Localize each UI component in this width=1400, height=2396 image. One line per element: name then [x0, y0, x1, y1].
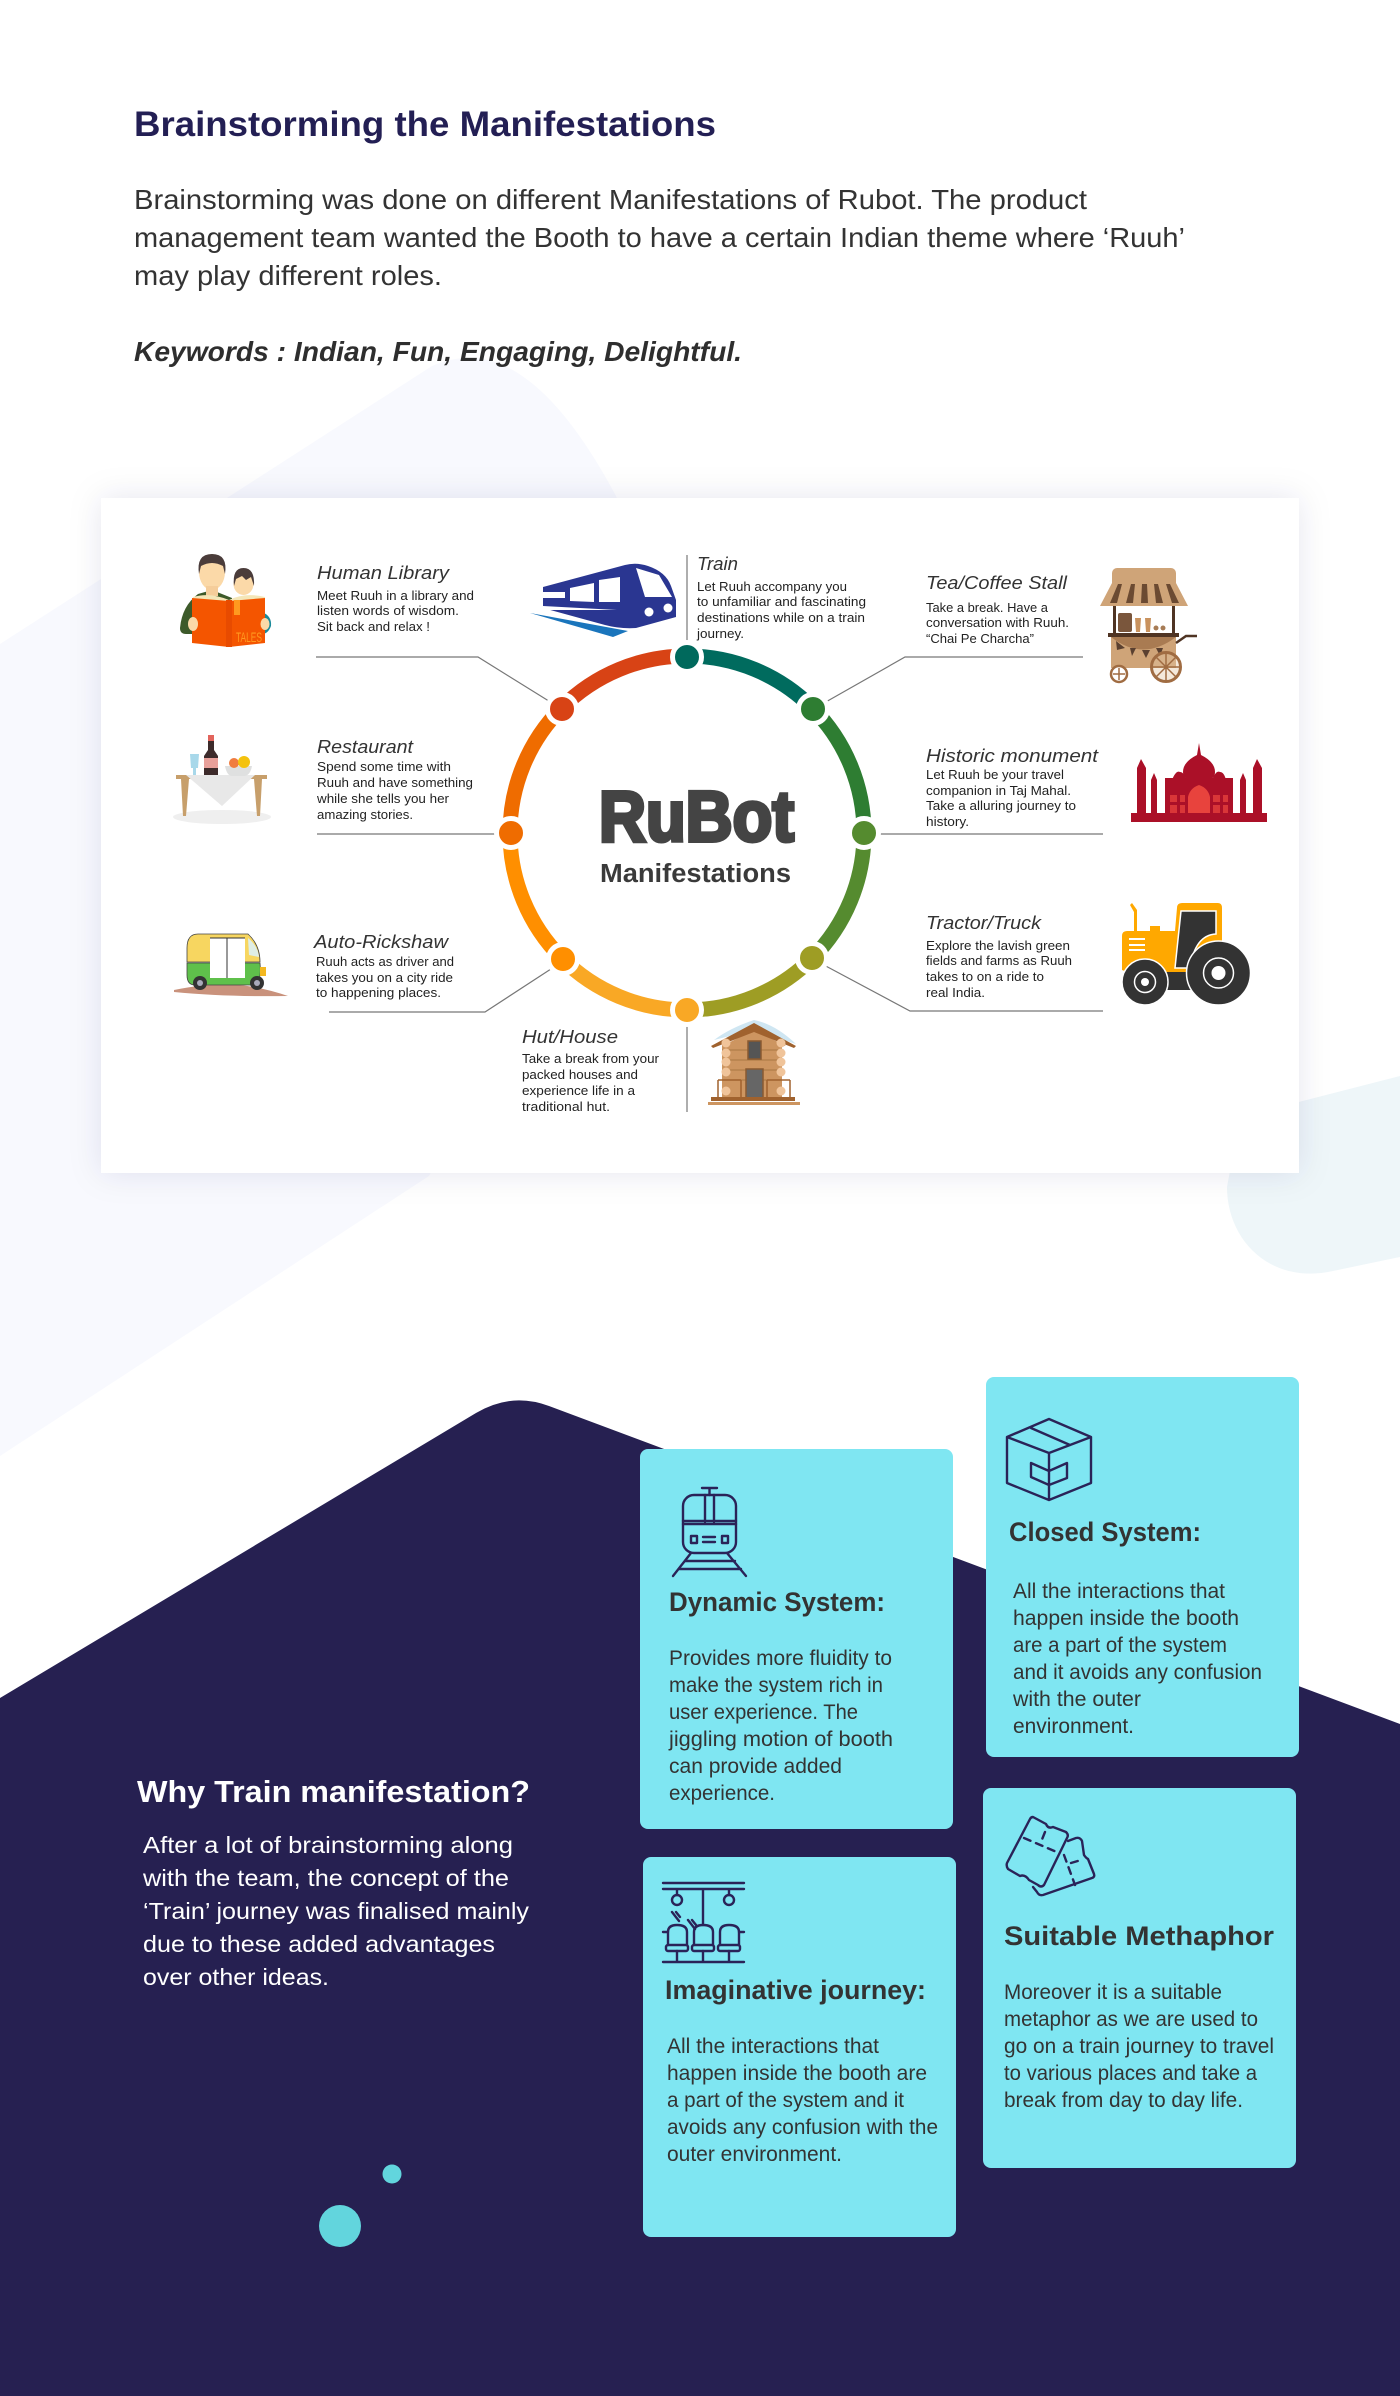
heading: Brainstorming the Manifestations — [134, 105, 716, 144]
label: Tractor/Truck — [926, 912, 1072, 1000]
card: Closed System: All the interactions that — [1013, 1580, 1225, 1603]
card: Closed System: happen inside the booth — [1013, 1607, 1239, 1630]
leader lines — [316, 555, 1103, 1112]
label: Historic monument: Let Ruuh be your travel — [926, 767, 1064, 782]
icon: hut — [708, 1020, 800, 1105]
decorative dot large — [319, 2205, 361, 2247]
card: Suitable Methaphor: to various places and take a — [1004, 2062, 1257, 2085]
card: Suitable Methaphor: Suitable Methaphor — [1004, 1921, 1274, 1951]
icon: restaurant table — [173, 735, 271, 824]
label: Auto-Rickshaw: Ruuh acts as driver and — [316, 954, 454, 969]
card: Imaginative journey: outer environment. — [667, 2143, 842, 2166]
card: Suitable Methaphor: break from day to day life. — [1004, 2089, 1243, 2112]
label: Restaurant: Restaurant — [317, 736, 414, 757]
label: Train: Let Ruuh accompany you — [697, 579, 847, 594]
card: Dynamic System: Provides more fluidity to — [669, 1647, 892, 1670]
card: Closed System: with the outer — [1012, 1688, 1141, 1711]
card: Dynamic System: jiggling motion of booth — [668, 1728, 893, 1751]
background shape: navy section — [0, 1400, 1400, 2396]
label: Hut/House: Take a break from your — [522, 1051, 660, 1066]
label: Hut/House — [522, 1026, 660, 1114]
label: Tractor/Truck: real India. — [926, 985, 985, 1000]
label: Historic monument: history. — [926, 814, 969, 829]
intro paragraph — [134, 184, 1185, 291]
label: Train — [696, 553, 866, 641]
keywords: Keywords : Indian, Fun, Engaging, Delightful. — [134, 336, 742, 367]
intro paragraph: management team wanted the Booth to have a certain Indian theme where ‘Ruuh’ — [134, 222, 1185, 253]
logo: RuBot: RuBot — [599, 778, 794, 857]
card: Suitable Methaphor: metaphor as we are used to — [1004, 2008, 1258, 2031]
label: Auto-Rickshaw: to happening places. — [316, 985, 441, 1000]
icon: tractor — [1122, 903, 1250, 1005]
icon: front-view train — [673, 1488, 746, 1576]
icon: human library: TALES — [236, 629, 262, 645]
card: Closed System: Closed System: — [1009, 1517, 1201, 1547]
icon: box — [1007, 1419, 1091, 1500]
card: Closed System — [986, 1377, 1299, 1757]
label: Restaurant: Ruuh and have something — [317, 775, 473, 790]
label: Tea/Coffee Stall: Take a break. Have a — [926, 600, 1049, 615]
label: Historic monument: Historic monument — [926, 745, 1099, 766]
paragraph: why train: due to these added advantages — [143, 1931, 495, 1957]
label: Hut/House: traditional hut. — [522, 1099, 610, 1114]
label: Tractor/Truck: takes to on a ride to — [926, 969, 1044, 984]
intro paragraph: may play different roles. — [134, 260, 442, 291]
label: Historic monument: companion in Taj Mahal. — [926, 783, 1071, 798]
label: Hut/House: experience life in a — [522, 1083, 636, 1098]
label: Human Library: listen words of wisdom. — [317, 603, 459, 618]
paragraph: why train: After a lot of brainstorming along — [143, 1832, 513, 1858]
card: Closed System: environment. — [1013, 1715, 1134, 1738]
label: Tractor/Truck: Explore the lavish green — [926, 938, 1070, 953]
paragraph: why train: ‘Train’ journey was finalised mainly — [143, 1898, 529, 1924]
paragraph: why train — [142, 1832, 529, 1990]
card: Dynamic System: make the system rich in — [669, 1674, 883, 1697]
icon: human library — [180, 554, 271, 647]
card: Imaginative journey: Imaginative journey: — [665, 1975, 926, 2005]
label: Restaurant — [316, 736, 473, 822]
card: Imaginative journey — [643, 1857, 956, 2237]
label: Tractor/Truck: Tractor/Truck — [926, 912, 1043, 933]
card: Suitable Methaphor: Moreover it is a suitable — [1004, 1981, 1222, 2004]
card: Dynamic System: can provide added — [669, 1755, 842, 1778]
background shape: pale teal — [1227, 1076, 1400, 1274]
label: Tea/Coffee Stall: conversation with Ruuh. — [926, 615, 1069, 630]
icon: tea stall — [1100, 568, 1197, 682]
label: Train: to unfamiliar and fascinating — [697, 594, 866, 609]
ring nodes — [496, 642, 878, 1024]
icon: auto rickshaw — [174, 934, 288, 996]
paragraph: why train: with the team, the concept of the — [142, 1865, 509, 1891]
label: Historic monument: Take a alluring journey to — [926, 798, 1076, 813]
label: Train: Train — [697, 553, 738, 574]
icon: historic monument — [1131, 743, 1267, 822]
ring chart — [510, 656, 864, 1010]
label: Tea/Coffee Stall: “Chai Pe Charcha” — [926, 631, 1034, 646]
decorative dot small — [382, 2164, 402, 2184]
label: Tea/Coffee Stall: Tea/Coffee Stall — [926, 572, 1068, 593]
label: Train: destinations while on a train — [697, 610, 865, 625]
label: Human Library: Meet Ruuh in a library and — [317, 588, 474, 603]
card: Closed System: and it avoids any confusion — [1013, 1661, 1262, 1684]
card: Suitable Methaphor — [983, 1788, 1296, 2168]
label: Auto-Rickshaw: takes you on a city ride — [316, 970, 453, 985]
card: Imaginative journey: happen inside the booth are — [667, 2062, 927, 2085]
label: Train: journey. — [696, 626, 744, 641]
background shape: pale lavender — [0, 358, 700, 1456]
card: Dynamic System: user experience. The — [669, 1701, 858, 1724]
label: Restaurant: Spend some time with — [317, 759, 451, 774]
card: Suitable Methaphor: go on a train journey to travel — [1004, 2035, 1274, 2058]
card: Imaginative journey: a part of the system and it — [667, 2089, 904, 2112]
label: Auto-Rickshaw: Auto-Rickshaw — [313, 931, 450, 952]
label: Restaurant: while she tells you her — [316, 791, 450, 806]
card: Closed System: are a part of the system — [1013, 1634, 1227, 1657]
label: Historic monument — [926, 745, 1099, 829]
panel: manifestations diagram — [101, 498, 1299, 1173]
icon: train seats — [663, 1883, 744, 1962]
card: Dynamic System — [640, 1449, 953, 1829]
card: Imaginative journey: avoids any confusion with the — [667, 2116, 938, 2139]
icon: tickets — [1007, 1817, 1094, 1895]
label: Human Library: Human Library — [317, 562, 451, 583]
paragraph: why train: over other ideas. — [143, 1964, 329, 1990]
label: Restaurant: amazing stories. — [317, 807, 413, 822]
label: Auto-Rickshaw — [313, 931, 454, 1000]
icon: train — [530, 564, 676, 637]
label: Hut/House: Hut/House — [522, 1026, 618, 1047]
heading: why train: Why Train manifestation? — [137, 1774, 530, 1809]
label: Hut/House: packed houses and — [522, 1067, 638, 1082]
intro paragraph: Brainstorming was done on different Manifestations of Rubot. The product — [134, 184, 1087, 215]
label: Tea/Coffee Stall — [926, 572, 1069, 646]
label: Tractor/Truck: fields and farms as Ruuh — [926, 953, 1072, 968]
card: Dynamic System: Dynamic System: — [669, 1587, 885, 1617]
label: Human Library — [317, 562, 474, 634]
card: Imaginative journey: All the interactions that — [667, 2035, 879, 2058]
card: Dynamic System: experience. — [669, 1782, 775, 1805]
logo subtitle: Manifestations — [600, 860, 791, 888]
label: Human Library: Sit back and relax ! — [317, 619, 430, 634]
